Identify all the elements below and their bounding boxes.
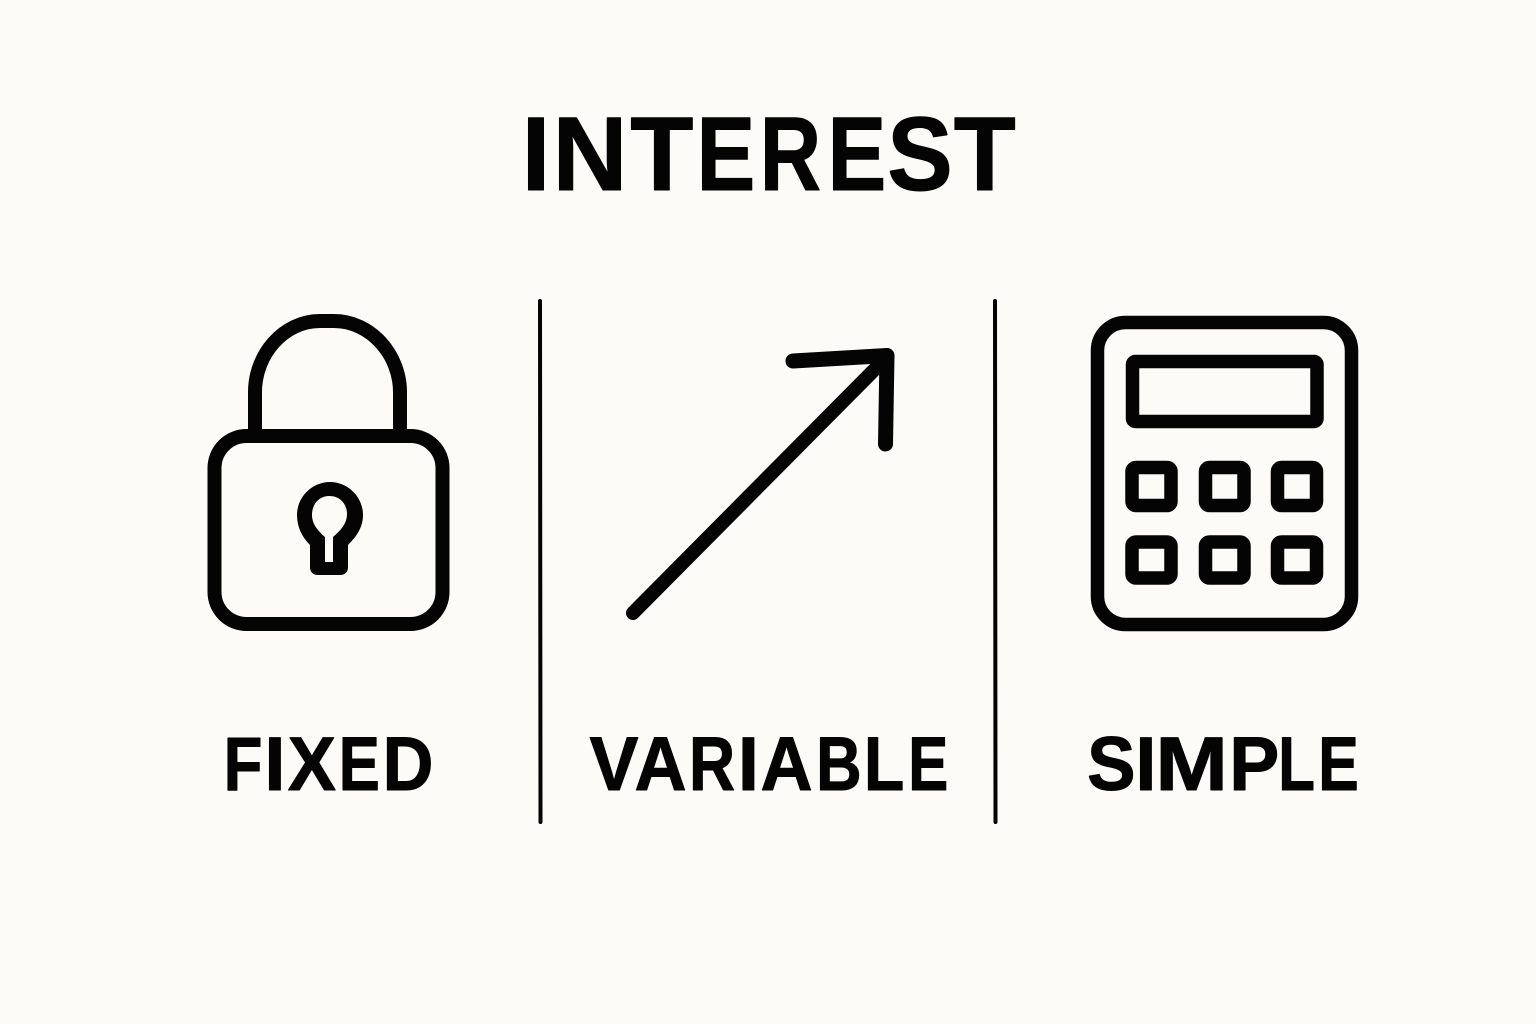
- label: simple: E: [1318, 722, 1359, 807]
- title: S: [887, 96, 953, 213]
- label: simple: L: [1278, 722, 1315, 807]
- title: I: [522, 96, 550, 213]
- icon: padlock: [214, 321, 442, 624]
- label: fixed: F: [224, 722, 262, 807]
- title: E: [696, 96, 755, 213]
- label: fixed: E: [339, 722, 380, 807]
- title: T: [954, 96, 1016, 213]
- label: variable: A: [760, 722, 813, 807]
- title: R: [760, 96, 821, 213]
- label: variable: L: [864, 722, 904, 807]
- label: simple: M: [1155, 722, 1228, 807]
- label: fixed: I: [264, 722, 286, 807]
- label: simple: I: [1135, 722, 1156, 807]
- label: variable: A: [634, 722, 687, 807]
- title: T: [630, 96, 693, 213]
- label: simple: P: [1229, 722, 1279, 807]
- title: N: [552, 96, 628, 213]
- label: variable: I: [738, 722, 759, 807]
- icon: calculator: [1098, 322, 1352, 624]
- label: variable: B: [816, 722, 862, 807]
- title: E: [828, 96, 886, 213]
- icon: rising arrow: [633, 356, 887, 613]
- label: variable: R: [689, 722, 735, 807]
- label: variable: E: [908, 722, 948, 807]
- label: fixed: X: [288, 722, 336, 807]
- label: simple: S: [1087, 722, 1136, 807]
- label: fixed: D: [383, 722, 433, 807]
- label: variable: V: [590, 722, 639, 807]
